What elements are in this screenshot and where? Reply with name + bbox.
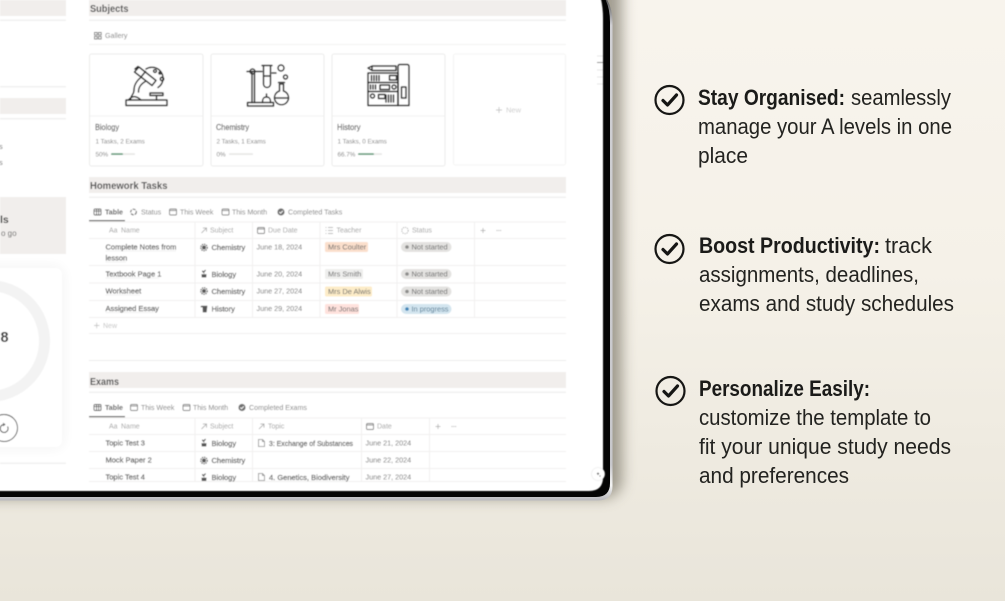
feature: Boost Productivity: track: [885, 233, 933, 258]
table header: Teacher: [336, 228, 362, 234]
row: Complete Notes from lesson: Mrs Coulter: [328, 243, 367, 252]
feature: Stay Organised: manage your A levels in one: [698, 114, 952, 139]
heading: Homework Tasks: [89, 177, 566, 193]
row: Textbook Page 1: Not started: [412, 270, 448, 279]
table header: Name: [121, 424, 140, 430]
heading: Homework Tasks: Homework Tasks: [90, 180, 168, 192]
card: Chemistry: 0%: [216, 152, 226, 158]
heading: Subjects: Subjects: [90, 3, 129, 15]
goals banner: ls: [0, 214, 9, 226]
gallery view tab: Gallery: [105, 32, 128, 40]
table header: Subject: [210, 228, 233, 234]
row: Mock Paper 2: June 22, 2024: [366, 456, 411, 464]
table header: Aa: [109, 424, 118, 430]
homework table: [89, 222, 566, 334]
card: Chemistry: Chemistry: [216, 123, 249, 132]
homework view tabs: This Month: [232, 208, 267, 216]
row: Worksheet: June 27, 2024: [256, 286, 302, 296]
row: Textbook Page 1: Textbook Page 1: [106, 270, 161, 278]
card: New: New: [506, 106, 522, 114]
row: Topic Test 3: Biology: [212, 439, 236, 448]
pomodoro timer card: [0, 268, 62, 447]
row: Topic Test 4: Biology: [212, 473, 236, 482]
tablet frame: [0, 0, 612, 500]
card: Biology: 50%: [96, 152, 109, 158]
exams view tabs: Completed Exams: [249, 404, 307, 412]
heading: Subjects: [89, 0, 566, 16]
row: Complete Notes from lesson: Complete Notes from: [106, 242, 176, 252]
row: Assigned Essay: History: [212, 304, 235, 314]
table header: Date: [377, 424, 392, 430]
table header: Status: [412, 228, 432, 234]
exams view tabs: [89, 404, 307, 417]
icon: bookshelf: [368, 64, 409, 106]
table header: [109, 227, 502, 234]
scroll markers: [597, 56, 603, 84]
goals banner: o go: [1, 229, 17, 238]
card: Biology: [90, 54, 203, 166]
row: Topic Test 3: 3: Exchange of Substances: [269, 439, 353, 448]
table header: Aa: [109, 228, 118, 234]
row: Topic Test 4: Topic Test 4: [106, 472, 145, 482]
row: Assigned Essay: Assigned Essay: [106, 304, 159, 313]
left sidebar column: [0, 0, 66, 464]
exams table: [89, 418, 566, 490]
table header: [109, 424, 456, 430]
feature: Personalize Easily: [656, 376, 951, 488]
row: Complete Notes from lesson: [106, 242, 452, 262]
row: Worksheet: Worksheet: [106, 286, 142, 296]
homework view tabs: Table: [105, 208, 123, 216]
icon: microscope: [126, 66, 167, 106]
row: Complete Notes from lesson: lesson: [106, 254, 127, 262]
icon: check circle: [656, 86, 684, 114]
row: Textbook Page 1: Biology: [212, 270, 236, 279]
row: Topic Test 3: Topic Test 3: [106, 438, 145, 448]
gallery view tab: [94, 32, 128, 40]
table header: Topic: [268, 424, 285, 430]
card: Biology: 1 Tasks, 2 Exams: [96, 138, 145, 146]
icon: check circle: [656, 377, 684, 405]
row: Worksheet: [106, 286, 452, 296]
row: Worksheet: Chemistry: [212, 287, 246, 296]
feature: Personalize Easily: and preferences: [699, 463, 849, 488]
feature: Boost Productivity: assignments, deadlines,: [699, 262, 919, 287]
row: Complete Notes from lesson: Chemistry: [212, 243, 246, 252]
heading: Exams: [89, 372, 566, 388]
row: Textbook Page 1: June 20, 2024: [256, 270, 302, 278]
card: Biology: Biology: [95, 123, 119, 132]
exams view tabs: This Month: [193, 404, 228, 412]
row: Assigned Essay: Mr Jonas: [328, 304, 359, 314]
row: Topic Test 4: June 27, 2024: [366, 472, 411, 482]
row: Assigned Essay: In progress: [412, 304, 449, 314]
feature: Boost Productivity: exams and study schedules: [699, 291, 954, 316]
row: Textbook Page 1: [106, 269, 452, 279]
tablet screen: [0, 0, 604, 491]
homework view tabs: Status: [141, 208, 162, 216]
row: Mock Paper 2: [106, 456, 411, 465]
feature: Boost Productivity: [656, 233, 954, 316]
card: Chemistry: [211, 54, 324, 166]
pomodoro timer card: 8: [0, 330, 9, 346]
row: Complete Notes from lesson: Not started: [412, 243, 448, 252]
add new row: New: [103, 323, 118, 330]
row: Textbook Page 1: Mrs Smith: [328, 270, 361, 279]
card: New: [454, 54, 566, 165]
exams view tabs: This Week: [141, 404, 175, 412]
feature: Stay Organised: place: [698, 143, 748, 168]
exams view tabs: Table: [105, 404, 123, 412]
homework view tabs: [89, 208, 343, 221]
device shadow: [0, 0, 622, 498]
table header: Subject: [210, 424, 233, 430]
icon: check circle: [656, 235, 684, 263]
row: Topic Test 3: June 21, 2024: [366, 438, 411, 448]
feature: Personalize Easily: fit your unique study needs: [699, 434, 951, 459]
table header: Name: [121, 228, 140, 234]
help button: [592, 468, 604, 480]
row: Worksheet: Not started: [412, 287, 448, 296]
card: History: [332, 54, 445, 166]
card: History: 1 Tasks, 0 Exams: [338, 138, 387, 146]
row: Complete Notes from lesson: June 18, 2024: [256, 242, 302, 252]
heading: Exams: Exams: [90, 376, 119, 388]
card: Chemistry: 2 Tasks, 1 Exams: [216, 138, 266, 146]
add new row: [94, 323, 118, 330]
feature: Stay Organised: seamlessly: [851, 85, 951, 110]
icon: lab equipment: [247, 65, 289, 106]
goals banner: [0, 197, 66, 254]
row: Topic Test 3: [106, 438, 411, 448]
homework view tabs: This Week: [180, 208, 214, 216]
row: Assigned Essay: June 29, 2024: [256, 304, 302, 313]
row: Mock Paper 2: Chemistry: [212, 456, 246, 465]
feature: Personalize Easily: Personalize Easily:: [699, 376, 870, 401]
card: History: History: [337, 123, 360, 132]
row: Worksheet: Mrs De Alwis: [328, 287, 371, 296]
row: Topic Test 4: [106, 472, 411, 482]
card: History: 66.7%: [338, 152, 356, 158]
row: Mock Paper 2: Mock Paper 2: [106, 456, 152, 464]
feature: Stay Organised: [656, 85, 952, 168]
feature: Boost Productivity: Boost Productivity:: [699, 233, 880, 258]
row: Topic Test 4: 4. Genetics, Biodiversity: [269, 473, 350, 482]
table header: Due Date: [268, 228, 298, 234]
row: Assigned Essay: [106, 304, 452, 314]
homework view tabs: Completed Tasks: [288, 208, 343, 216]
feature: Stay Organised: Stay Organised:: [698, 85, 845, 110]
feature: Personalize Easily: customize the template to: [699, 405, 931, 430]
